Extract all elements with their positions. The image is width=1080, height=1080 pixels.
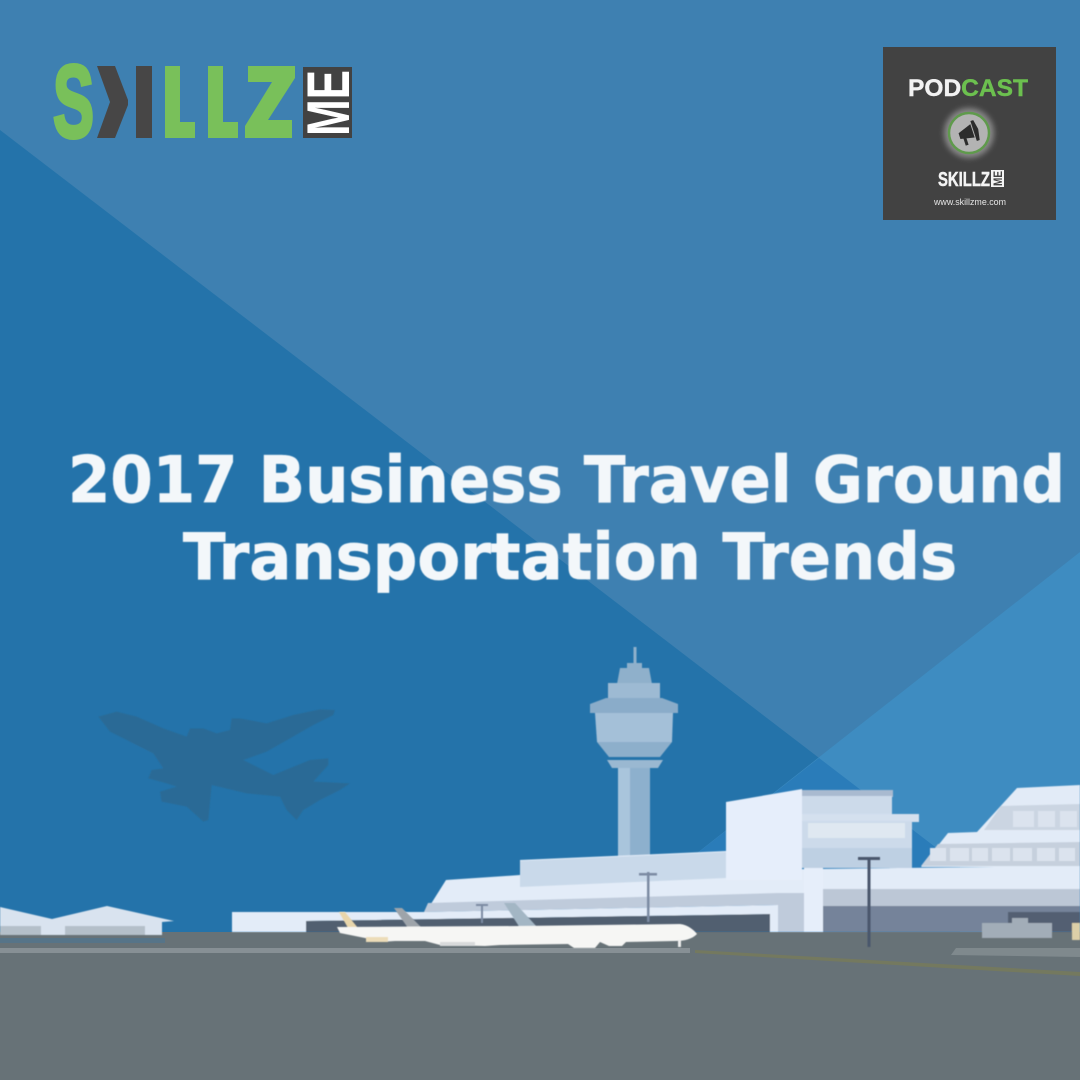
right upper deck [921,785,1080,867]
control tower [590,647,678,857]
grey band [424,893,778,912]
logo: SKILLZ ME: ME [295,70,362,136]
podcast url: www.skillzme.com [933,197,1006,208]
main concourse [424,851,1080,915]
lamp posts [476,857,880,947]
ground [0,932,1080,1080]
plane tail: cream [339,912,358,928]
podcast small logo: SKILLZ [938,169,990,191]
low left wing and roof strip [232,905,778,932]
logo ME badge [303,67,352,138]
logo K chevron and bar [97,66,128,138]
central block [726,789,802,880]
icon: megaphone [944,108,994,158]
title: Transportation Trends [183,521,957,595]
airplanes [337,903,697,948]
icon: airplane silhouette [98,709,350,822]
plane fuselage [337,924,697,948]
ground equipment [982,918,1052,938]
logo LLZ [165,66,195,138]
hangars [0,906,174,935]
plane tail: grey [394,908,422,928]
podcast badge [883,47,1056,220]
title [68,444,1065,595]
podcast small logo: ME [991,171,1005,186]
podcast heading: PODCAST [908,75,1028,102]
terminal building [232,785,1080,940]
plane tail: blue-grey [504,903,538,928]
logo S: S [53,44,94,159]
logo: SKILLZ ME [53,44,362,159]
runway lines [0,938,1080,976]
